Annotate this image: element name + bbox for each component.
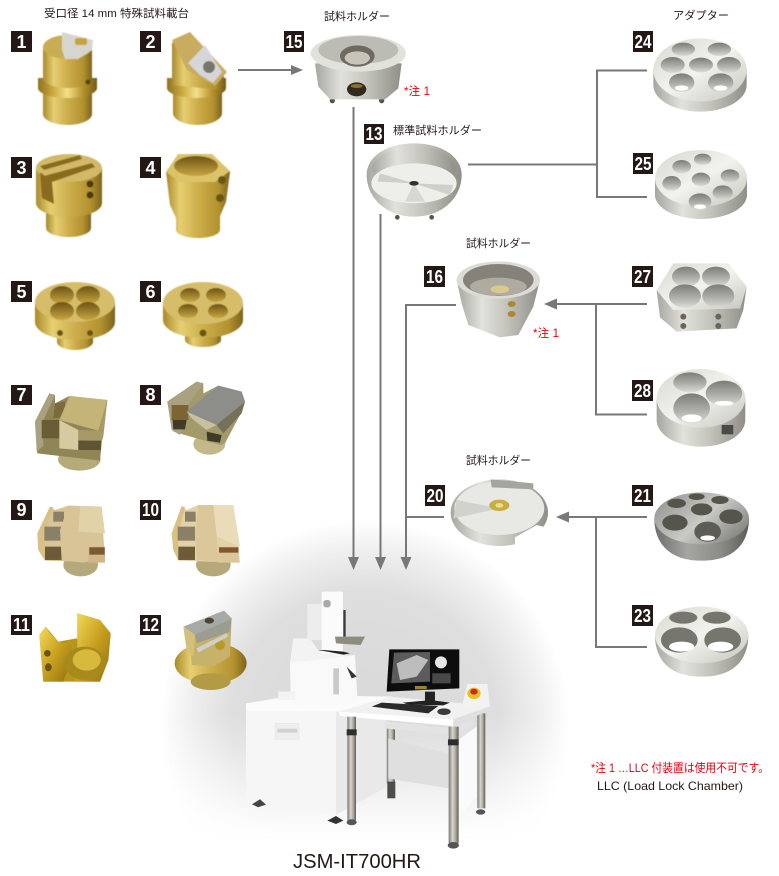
item 2 xyxy=(140,31,227,125)
shallow silver holder 20 xyxy=(451,479,550,546)
silver bowl holder 16 xyxy=(457,261,540,337)
item 15 xyxy=(284,31,406,103)
item 12 xyxy=(140,611,247,690)
item 24 xyxy=(633,31,747,112)
item 7 xyxy=(11,385,107,471)
heading: holder 15: 試料ホルダー xyxy=(324,9,390,23)
heading: adapters: アダプター xyxy=(673,8,729,22)
note marker for holder 16: *注 1 xyxy=(533,327,559,340)
adapter 25 with seven bores xyxy=(655,150,747,219)
arrow: holders 16 and 20 down to microscope xyxy=(400,305,456,570)
badge 24: 24 xyxy=(634,32,652,52)
badge 5: 5 xyxy=(16,282,27,302)
silver holder 15 xyxy=(311,35,406,103)
note marker for holder 15: *注 1 xyxy=(404,85,430,98)
arrow: adapters 21 and 23 to holder 20 xyxy=(556,512,647,647)
brass stub 1 xyxy=(38,32,97,125)
gold stub 11 with cut-out wall xyxy=(39,613,111,682)
keyboard and mouse xyxy=(372,703,451,715)
emergency stop box xyxy=(462,684,490,707)
badge 15: 15 xyxy=(286,32,302,52)
item 1 xyxy=(11,31,97,125)
badge 20: 20 xyxy=(426,486,444,506)
vise stub 9 xyxy=(37,506,105,576)
badge 16: 16 xyxy=(426,267,443,287)
heading: holder 16: 試料ホルダー xyxy=(466,236,531,250)
item 23 xyxy=(632,605,748,677)
badge 9: 9 xyxy=(16,500,27,520)
item 27 xyxy=(632,263,747,332)
badge 2: 2 xyxy=(145,32,156,52)
vise stub 8 xyxy=(167,382,245,455)
connector: holder 13 to adapters 24 and 25 xyxy=(468,70,647,197)
badge 4: 4 xyxy=(145,158,156,178)
item 3 xyxy=(11,154,102,237)
item 5 xyxy=(11,281,115,350)
item 20 xyxy=(425,479,550,546)
adapter 24 with seven bores xyxy=(653,38,747,112)
model name: JSM-IT700HR xyxy=(293,850,421,873)
brass stub 5 with four bores xyxy=(35,282,115,350)
adapter 23 with four bores xyxy=(655,607,748,677)
item 8 xyxy=(140,382,245,455)
electron column xyxy=(307,592,365,678)
desk xyxy=(339,697,491,849)
brass stub 4 with bore xyxy=(166,154,230,238)
brass stub 3 with slots xyxy=(36,154,102,237)
item 10 xyxy=(140,500,240,576)
badge 6: 6 xyxy=(145,282,156,302)
vise stub 10 xyxy=(172,505,240,576)
badge 7: 7 xyxy=(16,385,27,405)
badge 3: 3 xyxy=(16,158,27,178)
stub 12 with block on disc xyxy=(175,611,247,690)
item 13 xyxy=(364,124,462,220)
item 28 xyxy=(632,369,745,447)
badge 1: 1 xyxy=(16,32,27,52)
dark adapter 21 with seven bores xyxy=(654,492,749,561)
heading: standard holder 13: 標準試料ホルダー xyxy=(393,123,482,137)
item 6 xyxy=(140,281,243,347)
badge 27: 27 xyxy=(634,267,651,287)
item 21 xyxy=(632,485,749,561)
adapter 28 with three bores xyxy=(657,369,745,447)
badge 25: 25 xyxy=(634,154,652,174)
desk rear legs xyxy=(387,713,485,815)
brass stub 6 with four small bores xyxy=(163,282,243,347)
item 4 xyxy=(140,154,230,238)
badge 28: 28 xyxy=(634,381,651,401)
brass stub 2 with slanted face xyxy=(167,32,227,125)
arrow: stubs to holder 15 xyxy=(238,65,303,75)
badge 8: 8 xyxy=(145,385,156,405)
adapter 27 with four bores xyxy=(657,263,747,332)
arrow: holder 15 down to microscope xyxy=(348,107,359,570)
item 25 xyxy=(633,150,747,219)
arrow: holder 13 down to microscope xyxy=(375,214,386,570)
badge 21: 21 xyxy=(634,486,651,506)
item 16 xyxy=(424,261,540,337)
vise stub 7 xyxy=(35,393,107,471)
background glow behind the microscope xyxy=(150,510,580,876)
heading: holder 20: 試料ホルダー xyxy=(466,453,531,467)
arrow: adapters 27 and 28 to holder 16 xyxy=(544,298,647,414)
main cabinet xyxy=(246,695,393,824)
item 9 xyxy=(11,500,105,576)
chamber housing xyxy=(278,638,357,704)
badge 13: 13 xyxy=(366,124,382,144)
standard silver holder 13 xyxy=(367,143,462,220)
item 11 xyxy=(11,613,111,682)
heading: special sample stubs: 受口径 14 mm 特殊試料載台 xyxy=(44,6,189,20)
badge 11: 11 xyxy=(13,615,30,635)
microscope JSM-IT700HR xyxy=(246,592,491,849)
badge 12: 12 xyxy=(142,615,159,635)
badge 23: 23 xyxy=(634,606,651,626)
footnote: LLC definition: LLC (Load Lock Chamber) xyxy=(597,779,743,793)
monitor xyxy=(387,649,459,705)
badge 10: 10 xyxy=(142,500,159,520)
